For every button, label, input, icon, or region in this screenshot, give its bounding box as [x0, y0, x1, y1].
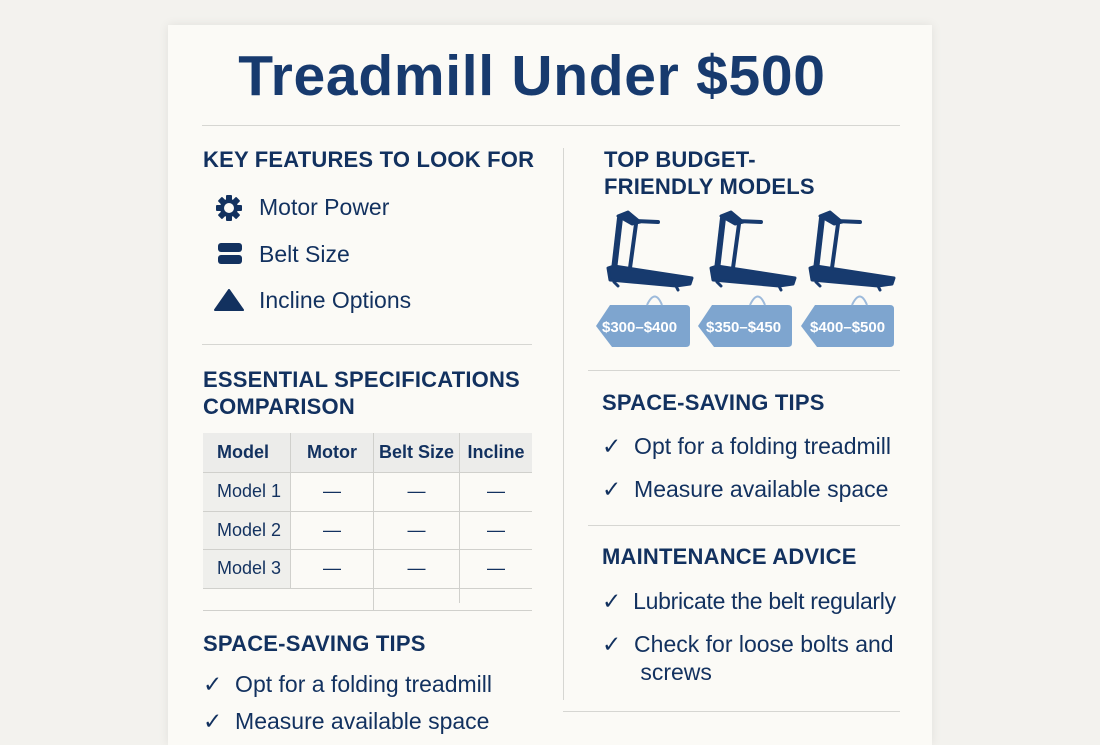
tip 2: ✓ Measure available space [203, 708, 489, 734]
table: specifications: — [487, 558, 505, 578]
heading: SPACE-SAVING TIPS [602, 390, 825, 415]
tip 1: ✓ Lubricate the belt regularly [602, 588, 896, 614]
table: specifications: — [408, 481, 426, 501]
heading: FRIENDLY MODELS [604, 174, 815, 199]
text: motor power: Motor Power [259, 194, 389, 220]
tip 1: ✓ Opt for a folding treadmill [602, 433, 891, 459]
icon: treadmills: $400–$500 [810, 319, 885, 336]
heading: TOP BUDGET- [604, 147, 756, 172]
panel: space-saving tips left [203, 631, 492, 734]
heading: essential specifications [203, 367, 520, 419]
tip 2: screws [640, 659, 712, 685]
icon: gear [216, 195, 242, 221]
panel: key features [203, 147, 534, 313]
table: specifications: Model 1 [217, 481, 281, 501]
heading: essential specifications: ESSENTIAL SPECIFICATIONS [203, 367, 520, 392]
table: specifications: — [487, 481, 505, 501]
table: specifications: — [323, 558, 341, 578]
table: specifications: Motor [307, 442, 357, 462]
panel: maintenance advice [602, 544, 896, 685]
table: specifications: Incline [467, 442, 524, 462]
tip 2: ✓ Measure available space [602, 476, 888, 502]
table: specifications: Model 3 [217, 558, 281, 578]
table: specifications [203, 433, 532, 611]
tip 1: ✓ Opt for a folding treadmill [203, 671, 492, 697]
title: Treadmill Under $500 [238, 44, 826, 108]
text: belt size: Belt Size [259, 241, 350, 267]
heading: essential specifications: COMPARISON [203, 394, 355, 419]
heading: MAINTENANCE ADVICE [602, 544, 857, 569]
icon: treadmills: $300–$400 [602, 319, 677, 336]
panel: space-saving tips right [602, 390, 891, 502]
text: incline options: Incline Options [259, 287, 411, 313]
tip 2: ✓ Check for loose bolts and [602, 631, 894, 657]
table: specifications: — [323, 520, 341, 540]
heading: key features: KEY FEATURES TO LOOK FOR [203, 147, 534, 172]
panel: top budget-friendly models [596, 147, 896, 347]
heading [604, 147, 815, 199]
table: specifications: — [408, 520, 426, 540]
table: specifications: Belt Size [379, 442, 454, 462]
heading: SPACE-SAVING TIPS [203, 631, 426, 656]
tip 2 [602, 631, 894, 685]
table: specifications: — [408, 558, 426, 578]
table: specifications: Model [217, 442, 269, 462]
icon: belt [218, 243, 242, 264]
icon: treadmills: $350–$450 [706, 319, 781, 336]
icon: triangle [214, 289, 244, 311]
table: specifications: Model 2 [217, 520, 281, 540]
table: specifications: — [487, 520, 505, 540]
table: specifications: — [323, 481, 341, 501]
icon: treadmills [596, 210, 896, 347]
card panel [168, 25, 932, 745]
price tags [596, 305, 894, 347]
